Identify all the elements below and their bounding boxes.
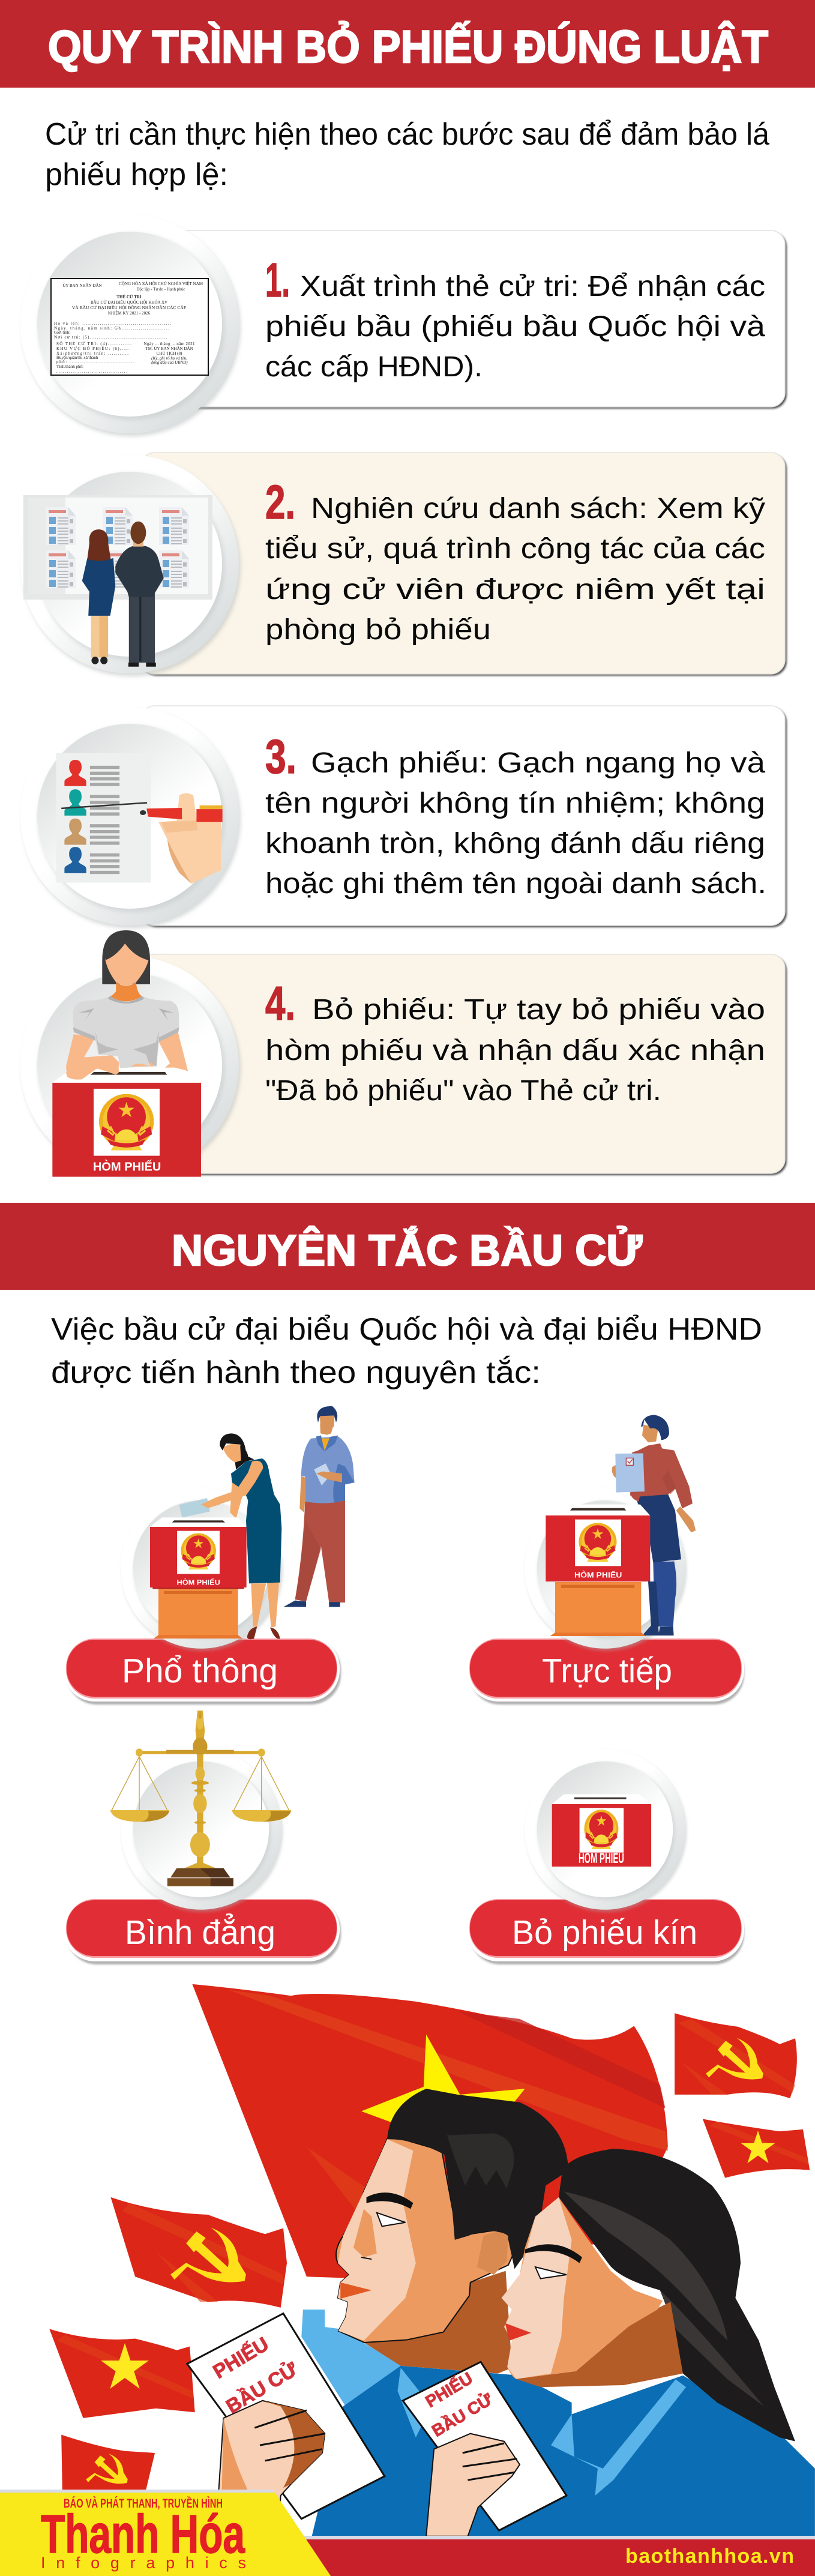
figure: man and woman holding ballots <box>187 2089 815 2536</box>
text: step 2: 2. <box>265 475 295 529</box>
icon: disc phổ thông <box>121 1488 283 1651</box>
icon: disc 1 <box>20 215 241 436</box>
flag: large national flag <box>192 1984 668 2278</box>
panel: bỏ phiếu kín <box>467 1749 744 1964</box>
icon: voters at ballot box <box>150 1406 355 1639</box>
label: hòm phiếu: HÒM PHIẾU <box>579 1850 624 1867</box>
icon: voter card: phố: ................................. <box>56 360 134 364</box>
icon: voter card: Ngày, tháng, năm sinh: Gh......................... <box>54 326 169 331</box>
icon: ballot being crossed out <box>56 753 223 883</box>
icon: voter card: (Ký, ghi rõ họ và tên, <box>151 356 187 361</box>
header: nguyên tắc bầu cử: NGUYÊN TẮC BẦU CỬ <box>172 1226 642 1275</box>
flag: national flag lower left <box>49 2329 195 2418</box>
text: step 4 <box>265 977 765 1107</box>
icon: couple reading <box>82 522 164 667</box>
icon: woman with ballot at box <box>546 1415 696 1636</box>
icon: disc 4 <box>20 956 241 1178</box>
text: bỏ phiếu kín: Bỏ phiếu kín <box>512 1913 697 1952</box>
text: step 3: khoanh tròn, không đánh dấu riêng <box>265 828 765 859</box>
icon: voter card: Độc lập - Tự do - Hạnh phúc <box>137 287 185 292</box>
icon: ballot box <box>552 1794 651 1867</box>
text: step 3: Gạch phiếu: Gạch ngang họ và <box>311 747 765 779</box>
icon: voter card: CHỦ TỊCH (8) <box>157 351 182 356</box>
pill: bình đẳng <box>64 1898 341 1964</box>
icon: voter card: Họ và tên: .............................................. <box>54 321 171 326</box>
card background 1 <box>140 230 787 409</box>
icon: voter card: Nơi cư trú: (5)........................................... <box>54 335 167 340</box>
icon: disc trực tiếp <box>525 1488 687 1651</box>
icon: disc 2 <box>20 455 241 676</box>
website: baothanhhoa.vn <box>625 2545 794 2568</box>
ballot text: man <box>209 2332 302 2418</box>
icon: voter card: .................................. <box>56 369 127 374</box>
flag: party flag top right <box>675 2013 797 2098</box>
icon: voter card: VÀ BẦU CỬ ĐẠI BIỂU HỘI ĐỒNG NHÂN DÂN CÁC CẤP <box>72 305 186 310</box>
intro text: principles <box>51 1312 762 1390</box>
text: step 2: phòng bỏ phiếu <box>265 614 491 646</box>
text: step 2 <box>265 475 765 646</box>
text: step 4: "Đã bỏ phiếu" vào Thẻ cử tri. <box>265 1075 661 1107</box>
icon: voters at ballot box: HÒM PHIẾU <box>176 1578 220 1587</box>
icon: voter card: Giới tính: <box>54 330 70 335</box>
panel: phổ thông <box>64 1406 355 1705</box>
card background 4 <box>140 954 787 1175</box>
icon: voter card: NHIỆM KỲ 2021 - 2026 <box>108 311 151 316</box>
icon: candidate notice board <box>23 495 212 600</box>
pill: phổ thông <box>64 1637 341 1705</box>
intro text: principles: Việc bầu cử đại biểu Quốc hội và đại biểu HĐND <box>51 1312 762 1347</box>
flag: party flag left <box>110 2197 287 2308</box>
text: step 3 <box>265 730 766 900</box>
panel: step 2 <box>20 453 787 676</box>
text: step 4: Bỏ phiếu: Tự tay bỏ phiếu vào <box>312 994 765 1026</box>
logo panel: BÁO VÀ PHÁT THANH, TRUYỀN HÌNH <box>64 2497 223 2511</box>
text: step 1 <box>265 253 765 383</box>
card background 2 <box>140 453 787 676</box>
intro text: principles: được tiến hành theo nguyên tắc: <box>51 1355 541 1390</box>
illustration: voters with flags <box>49 1984 815 2536</box>
text: step 4: hòm phiếu và nhận dấu xác nhận <box>265 1035 765 1067</box>
ballot text: man: BẦU CỬ <box>222 2358 302 2418</box>
icon: voter card <box>51 278 208 375</box>
panel: bình đẳng <box>64 1711 341 1964</box>
icon: woman with ballot at box: HÒM PHIẾU <box>574 1570 622 1579</box>
header: quy trình bỏ phiếu đúng luật: QUY TRÌNH BỎ PHIẾU ĐÚNG LUẬT <box>48 21 768 73</box>
icon: voter card: Tỉnh/thành phố: <box>56 364 83 369</box>
logo panel: Infographics <box>41 2554 246 2572</box>
card background 3 <box>140 706 787 927</box>
pill: bỏ phiếu kín <box>467 1898 744 1964</box>
text: step 1: 1. <box>265 253 290 307</box>
text: step 1: Xuất trình thẻ cử tri: Để nhận các <box>300 271 765 302</box>
ballot text: woman: BẦU CỬ <box>429 2389 496 2440</box>
icon: voter card: đóng dấu của UBND) <box>151 360 188 365</box>
panel: step 1 <box>20 215 787 436</box>
text: step 3: hoặc ghi thêm tên ngoài danh sách. <box>265 868 766 900</box>
text: step 3: tên người không tín nhiệm; không <box>265 787 765 819</box>
pill: trực tiếp <box>467 1637 744 1705</box>
icon: balance scale <box>110 1711 291 1886</box>
icon: voter card: Huyện/quận/thị xã/thành <box>56 355 98 360</box>
text: step 2: ứng cử viên được niêm yết tại <box>265 574 765 606</box>
text: trực tiếp: Trực tiếp <box>542 1652 672 1690</box>
icon: voter card: Ngày ... tháng ... năm 2021 <box>144 342 195 346</box>
logo panel <box>0 2490 331 2576</box>
icon: woman voting at ballot box: HÒM PHIẾU <box>93 1160 161 1174</box>
flag: party flag bottom left <box>61 2435 155 2492</box>
ballot text: man: PHIẾU <box>209 2332 272 2383</box>
text: step 1: các cấp HĐND). <box>265 351 483 383</box>
intro text: steps <box>45 117 769 192</box>
icon: voter card: SỐ THẺ CỬ TRI: (4)............. <box>56 342 131 346</box>
icon: voter card: TM. ỦY BAN NHÂN DÂN <box>145 346 193 351</box>
icon: voter card: KHU VỰC BỎ PHIẾU: (6)..... <box>56 346 128 351</box>
icon: voter card: Xã/phường/thị trấn: ........... <box>56 351 128 356</box>
text: step 4: 4. <box>265 977 295 1030</box>
text: bình đẳng: Bình đẳng <box>125 1913 275 1952</box>
icon: woman voting at ballot box <box>52 930 201 1177</box>
text: step 1: phiếu bầu (phiếu bầu Quốc hội và <box>265 311 765 343</box>
intro text: steps: phiếu hợp lệ: <box>45 157 228 192</box>
icon: disc bỏ phiếu kín <box>525 1749 687 1912</box>
logo panel: Thanh Hóa <box>41 2505 245 2565</box>
intro text: steps: Cử tri cần thực hiện theo các bước sau để đảm bảo lá <box>45 117 769 152</box>
icon: voter card: CỘNG HÒA XÃ HỘI CHỦ NGHĨA VIỆT NAM <box>119 281 203 286</box>
icon: voter card: ỦY BAN NHÂN DÂN <box>62 283 102 288</box>
icon: voter card: THẺ CỬ TRI <box>116 295 142 299</box>
icon: disc 3 <box>20 707 241 928</box>
text: step 3: 3. <box>265 730 296 783</box>
icon: disc bình đẳng <box>121 1749 283 1912</box>
text: phổ thông: Phổ thông <box>122 1652 278 1690</box>
panel: step 4 <box>20 930 787 1178</box>
header: nguyên tắc bầu cử <box>0 1203 815 1290</box>
footer band <box>0 2536 815 2576</box>
header: quy trình bỏ phiếu đúng luật <box>0 0 815 88</box>
footer <box>0 2490 815 2576</box>
flag: national flag right <box>703 2119 810 2178</box>
panel: trực tiếp <box>467 1415 744 1705</box>
text: step 2: Nghiên cứu danh sách: Xem kỹ <box>311 493 765 525</box>
ballot text: woman <box>422 2369 496 2440</box>
text: step 2: tiểu sử, quá trình công tác của các <box>265 533 765 565</box>
icon: voter card: BẦU CỬ ĐẠI BIỂU QUỐC HỘI KHÓA XV <box>91 300 167 305</box>
ballot text: woman: PHIẾU <box>422 2369 476 2411</box>
panel: step 3 <box>20 706 787 928</box>
